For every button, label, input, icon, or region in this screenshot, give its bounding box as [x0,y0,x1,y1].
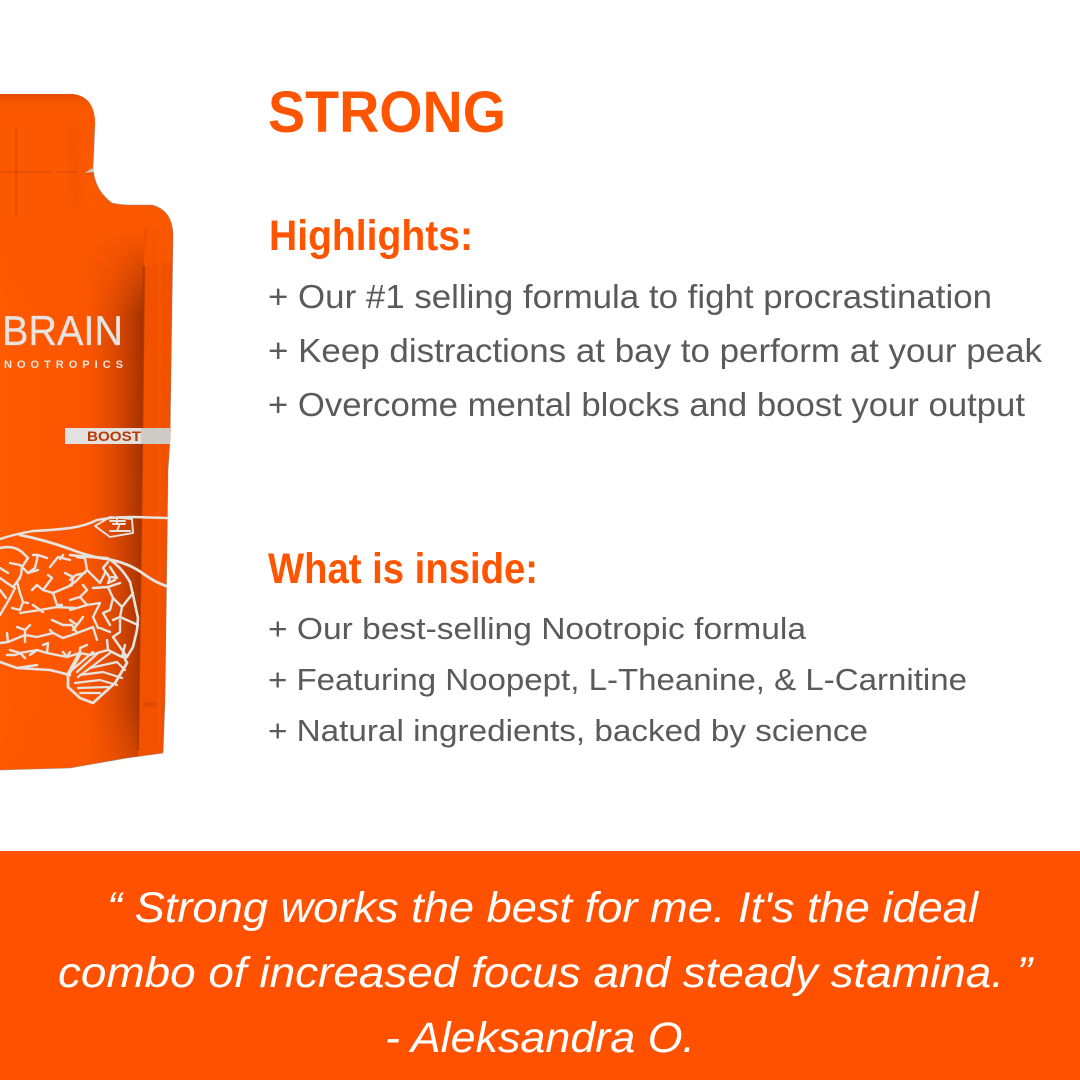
product pouch [0,90,176,775]
highlights list: + Overcome mental blocks and boost your output [268,386,1025,423]
right lobes [70,557,138,630]
highlights list [268,278,1043,423]
pouch label: boost [65,428,170,444]
cerebellum [68,655,127,703]
testimonial band [0,851,1080,1080]
heading: highlights: Highlights: [269,212,473,260]
ingredients list: + Featuring Noopept, L-Theanine, & L-Carnitine [268,662,967,697]
pouch label: boost: BOOST [87,428,141,444]
heading: what is inside: What is inside: [268,545,538,593]
lower contour [0,662,70,675]
pouch brand name: BRAIN [2,307,123,354]
outer contour [20,535,166,586]
highlights list: + Keep distractions at bay to perform at your peak [268,332,1043,369]
testimonial quote: “ Strong works the best for me. It's the ideal [107,884,980,932]
ingredients list [268,611,967,748]
ingredients list: + Our best-selling Nootropic formula [268,611,807,646]
left lobes [0,552,75,615]
testimonial quote: - Aleksandra O. [385,1014,695,1062]
icon: brain illustration [0,517,167,703]
pouch subtitle: NOOTROPICS [4,359,123,371]
testimonial quote: combo of increased focus and steady stamina. ” [58,949,1034,997]
highlights list: + Our #1 selling formula to fight procrastination [268,278,992,315]
lower lobes [0,620,127,658]
title: STRONG [268,80,506,145]
ingredients list: + Natural ingredients, backed by science [268,713,868,748]
testimonial quote [58,884,1034,1062]
